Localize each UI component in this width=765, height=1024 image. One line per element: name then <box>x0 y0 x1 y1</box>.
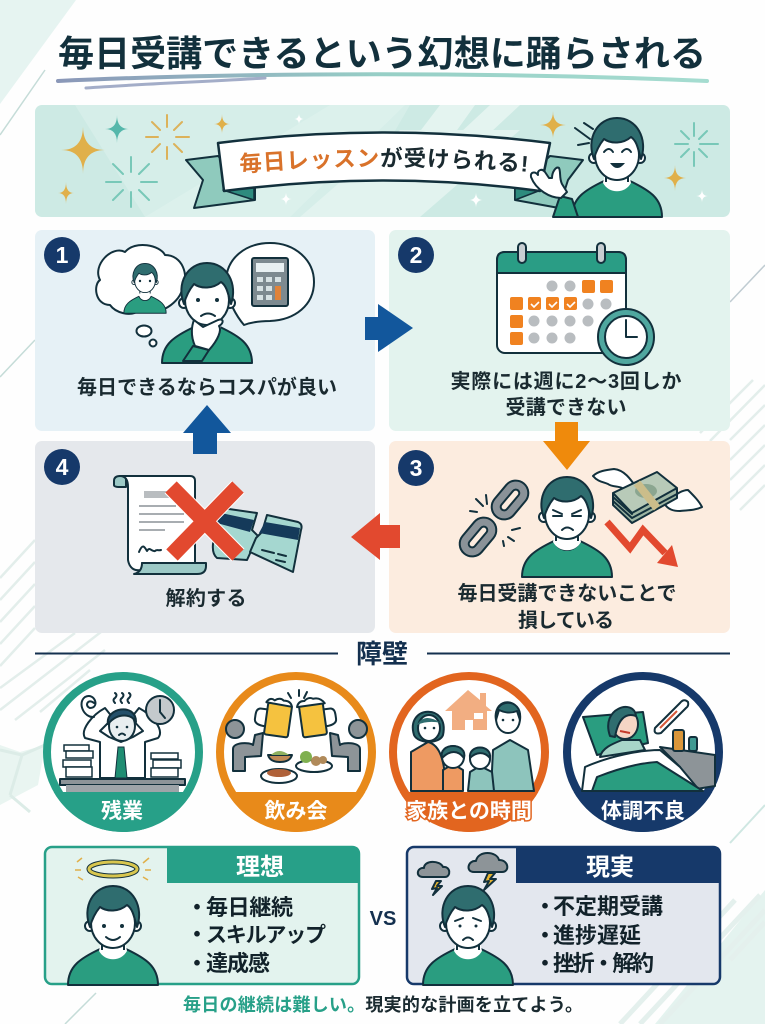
icon: sick in bed <box>582 700 715 791</box>
panel: step 4 <box>35 441 375 633</box>
icon: stressed worker <box>60 693 185 793</box>
panel: ideal <box>45 846 360 985</box>
icon: calendar <box>497 243 654 365</box>
list: 進捗遅延 <box>553 923 641 948</box>
barrier: family time: 家族との時間 <box>406 800 532 823</box>
barrier: overtime: 残業 <box>101 799 143 823</box>
icon: money with wings <box>593 469 702 523</box>
list: スキルアップ <box>206 924 326 947</box>
barrier: poor health <box>567 676 719 832</box>
list: ・ <box>534 951 556 976</box>
number badge 2 <box>398 237 434 273</box>
icon: red cross <box>171 487 238 555</box>
arrow: step 4 to 1 <box>183 405 231 454</box>
barrier: overtime <box>47 676 199 832</box>
list: ・ <box>186 951 208 976</box>
list: ・ <box>534 894 556 919</box>
arrow: step 2 to 3 <box>543 422 590 470</box>
icon: thought bubble <box>96 245 185 346</box>
number badge 3 <box>398 450 434 486</box>
ribbon: 毎日レッスンが受けられる! <box>240 146 527 174</box>
panel: step 3: 損している <box>518 609 614 632</box>
number badge 1 <box>44 237 80 273</box>
icon: speech bubble with calculator <box>226 243 314 325</box>
icon: toasting people <box>226 690 367 783</box>
text: 毎日受講できないことで <box>458 582 676 605</box>
icon: sad man with clouds <box>418 853 513 985</box>
panel: step 2: 受講できない <box>506 396 626 419</box>
text: 解約する <box>166 587 246 610</box>
list <box>186 895 326 976</box>
text: 実際には週に2〜3回しか <box>450 370 682 393</box>
list <box>534 894 663 976</box>
icon: broken card <box>213 508 302 572</box>
arrow: step 3 to 4 <box>351 513 400 560</box>
barrier: poor health: 体調不良 <box>601 800 685 823</box>
number badge 4 <box>44 449 80 485</box>
title: 毎日受講できるという幻想に踊らされる <box>58 33 706 74</box>
number badge 2: 2 <box>410 242 422 268</box>
icon: thinking man <box>162 263 252 363</box>
panel: ideal: 理想 <box>236 854 284 881</box>
list: ・ <box>186 895 208 920</box>
panel: reality: 現実 <box>586 854 634 881</box>
footer message: 毎日の継続は難しい。現実的な計画を立てよう。 <box>183 994 583 1015</box>
icon: halo man <box>68 858 158 985</box>
vs label: VS <box>370 908 396 930</box>
list: 達成感 <box>206 951 270 976</box>
panel: reality <box>407 846 721 985</box>
panel: step 3 <box>389 441 730 633</box>
barrier: drinking party <box>220 676 372 832</box>
heading: barriers: 障壁 <box>356 639 408 669</box>
number badge 1: 1 <box>56 242 69 268</box>
list: 挫折・解約 <box>553 951 654 976</box>
list: 不定期受講 <box>553 894 663 919</box>
list: 毎日継続 <box>206 895 293 920</box>
icon: broken chain <box>461 482 527 555</box>
panel: step 2 <box>389 230 730 431</box>
icon: family <box>411 690 534 791</box>
number badge 4: 4 <box>56 454 69 480</box>
ribbon <box>185 131 584 209</box>
icon: cheerful man <box>531 118 662 217</box>
panel: banner <box>35 105 730 218</box>
icon: contract <box>114 476 206 574</box>
icon: falling arrow <box>607 522 678 567</box>
barrier: family time <box>393 676 545 832</box>
barrier: drinking party: 飲み会 <box>264 800 328 823</box>
number badge 3: 3 <box>410 455 422 481</box>
panel: step 1 <box>35 230 375 431</box>
arrow: step 1 to 2 <box>365 304 413 352</box>
icon: sparkles <box>58 111 718 208</box>
icon: frustrated man <box>522 477 612 577</box>
text: 毎日できるならコスパが良い <box>77 375 337 399</box>
list: ・ <box>534 923 556 948</box>
list: ・ <box>186 922 208 947</box>
